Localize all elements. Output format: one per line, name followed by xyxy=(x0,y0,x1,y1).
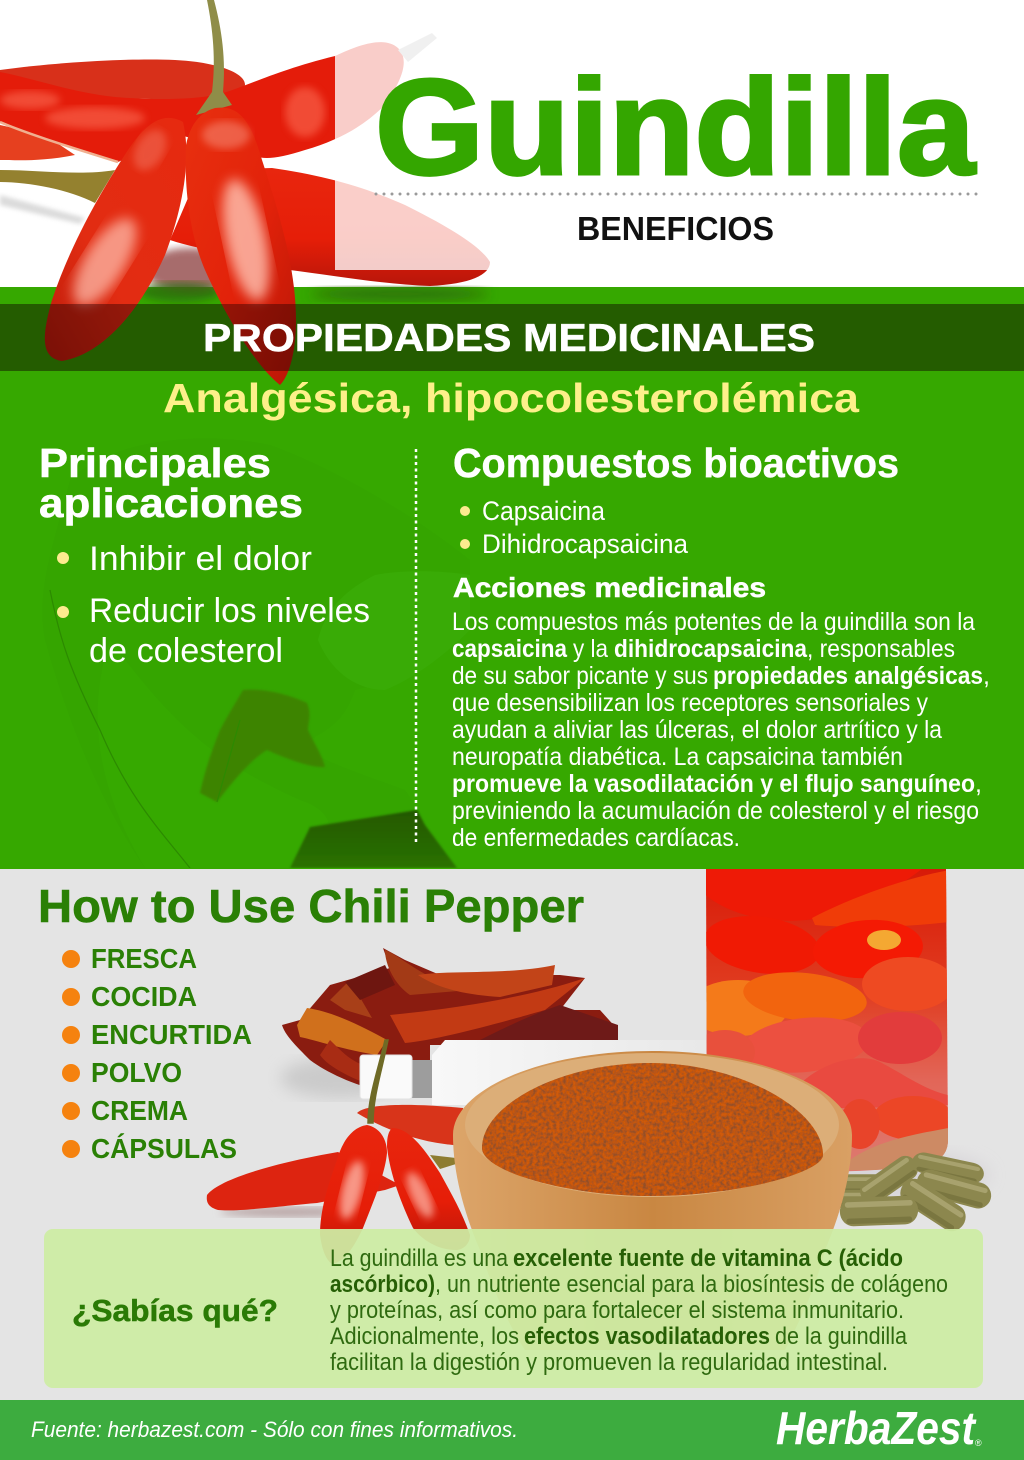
callout text: efectos vasodilatadores xyxy=(524,1323,770,1350)
footer bar xyxy=(0,1400,1024,1460)
callout: sabias que xyxy=(44,1229,983,1388)
image: cream tube xyxy=(360,1040,706,1105)
text block: acciones medicinales: Los compuestos más potentes de la guindilla son la xyxy=(452,608,975,636)
text block: acciones medicinales: , xyxy=(983,662,990,690)
highlights on front chilies xyxy=(62,121,278,315)
text block: acciones medicinales: ayudan a aliviar las úlceras, el dolor artrítico y la xyxy=(452,716,942,744)
list: compuestos: Capsaicina xyxy=(482,496,606,526)
sub heading: properties: Analgésica, hipocolesterolémica xyxy=(163,375,860,421)
image: dried chilies xyxy=(280,948,618,1098)
image: red chili peppers xyxy=(0,0,490,385)
callout text: ascórbico) xyxy=(330,1271,435,1298)
text block: acciones medicinales: de enfermedades cardíacas. xyxy=(452,824,740,852)
illustration: person holding lower back xyxy=(50,590,457,868)
inner bowl wall xyxy=(465,1053,839,1197)
list: forms of use: ENCURTIDA xyxy=(91,1019,252,1050)
list: forms of use: CÁPSULAS xyxy=(91,1133,237,1164)
list: forms of use: FRESCA xyxy=(91,943,197,974)
list: forms of use xyxy=(62,943,252,1164)
callout text: excelente fuente de vitamina C (ácido xyxy=(513,1245,903,1272)
text block: acciones medicinales: promueve la vasodilatación y el flujo sanguíneo xyxy=(452,770,975,798)
long chili xyxy=(0,42,404,162)
image: bowl of chili powder xyxy=(453,1051,852,1350)
chili shadows xyxy=(0,195,490,302)
list: compuestos: Dihidrocapsaicina xyxy=(482,529,689,559)
callout text: Adicionalmente, los xyxy=(330,1323,519,1350)
dotted title divider xyxy=(376,192,978,196)
list: compuestos xyxy=(460,496,689,559)
chili powder xyxy=(482,1063,823,1196)
left stem xyxy=(0,170,115,203)
list: aplicaciones xyxy=(57,540,370,670)
front left chili xyxy=(45,118,186,361)
translucent white title panel xyxy=(335,30,500,270)
text block: acciones medicinales: neuropatía diabética. La capsaicina también xyxy=(452,743,903,771)
heading: principales aplicaciones xyxy=(39,440,303,526)
list: forms of use: CREMA xyxy=(91,1095,188,1126)
front right chili xyxy=(186,108,296,385)
text block: acciones medicinales: y la xyxy=(573,635,608,663)
text block: acciones medicinales: , responsables xyxy=(807,635,955,663)
bottom-left back chili xyxy=(0,125,75,160)
logo: HerbaZest: HerbaZest xyxy=(776,1402,976,1454)
heading: propiedades medicinales: PROPIEDADES MEDICINALES xyxy=(203,317,815,360)
panel: how to use background xyxy=(0,869,1024,1400)
text block: acciones medicinales: de su sabor picante y sus xyxy=(452,662,708,690)
list: forms of use: COCIDA xyxy=(91,981,197,1012)
text block: acciones medicinales: propiedades analgésicas xyxy=(713,662,983,690)
text block: acciones medicinales: capsaicina xyxy=(452,635,568,663)
text block: acciones medicinales: dihidrocapsaicina xyxy=(614,635,808,663)
callout text: facilitan la digestión y promueven la regularidad intestinal. xyxy=(330,1349,888,1376)
callout text: La guindilla es una xyxy=(330,1245,509,1272)
image: pickled chili jar xyxy=(706,869,984,1196)
text block: acciones medicinales xyxy=(452,608,990,852)
image: fresh chilies lower xyxy=(207,1040,470,1264)
callout text xyxy=(330,1245,948,1376)
list: aplicaciones: de colesterol xyxy=(89,632,283,670)
text block: acciones medicinales: previniendo la acumulación de colesterol y el riesgo xyxy=(452,797,979,825)
dotted column divider xyxy=(415,449,417,843)
title: Guindilla xyxy=(375,51,976,203)
image: capsules xyxy=(818,1150,994,1236)
lower right chili xyxy=(170,168,490,286)
subtitle: BENEFICIOS xyxy=(577,210,774,247)
dark heading band xyxy=(0,304,1024,371)
text block: acciones medicinales: , xyxy=(975,770,982,798)
heading: acciones medicinales: Acciones medicinales xyxy=(453,572,766,603)
heading: compuestos bioactivos: Compuestos bioactivos xyxy=(453,440,899,486)
callout box xyxy=(44,1229,983,1388)
list: aplicaciones: Inhibir el dolor xyxy=(89,540,312,578)
long chili edge xyxy=(0,122,118,162)
heading: principales aplicaciones: Principales xyxy=(39,440,271,486)
list: aplicaciones: Reducir los niveles xyxy=(89,592,370,630)
text block: acciones medicinales: que desensibilizan los receptores sensoriales y xyxy=(452,689,928,717)
heading: principales aplicaciones: aplicaciones xyxy=(39,480,303,526)
chili stem top right xyxy=(398,33,437,62)
callout heading: ¿Sabías qué? xyxy=(72,1293,278,1328)
callout text: y proteínas, así como para fortalecer el sistema inmunitario. xyxy=(330,1297,904,1324)
chili highlights xyxy=(0,87,325,137)
list: forms of use: POLVO xyxy=(91,1057,182,1088)
heading: how to use: How to Use Chili Pepper xyxy=(38,880,584,932)
logo: HerbaZest: ® xyxy=(975,1438,982,1448)
footer source: Fuente: herbazest.com - Sólo con fines informativos. xyxy=(31,1417,518,1442)
back chili xyxy=(0,59,245,100)
top stem xyxy=(196,0,232,115)
callout text: de la guindilla xyxy=(775,1323,908,1350)
callout text: , un nutriente esencial para la biosíntesis de colágeno xyxy=(435,1271,948,1298)
panel: propiedades medicinales green background xyxy=(0,287,1024,869)
